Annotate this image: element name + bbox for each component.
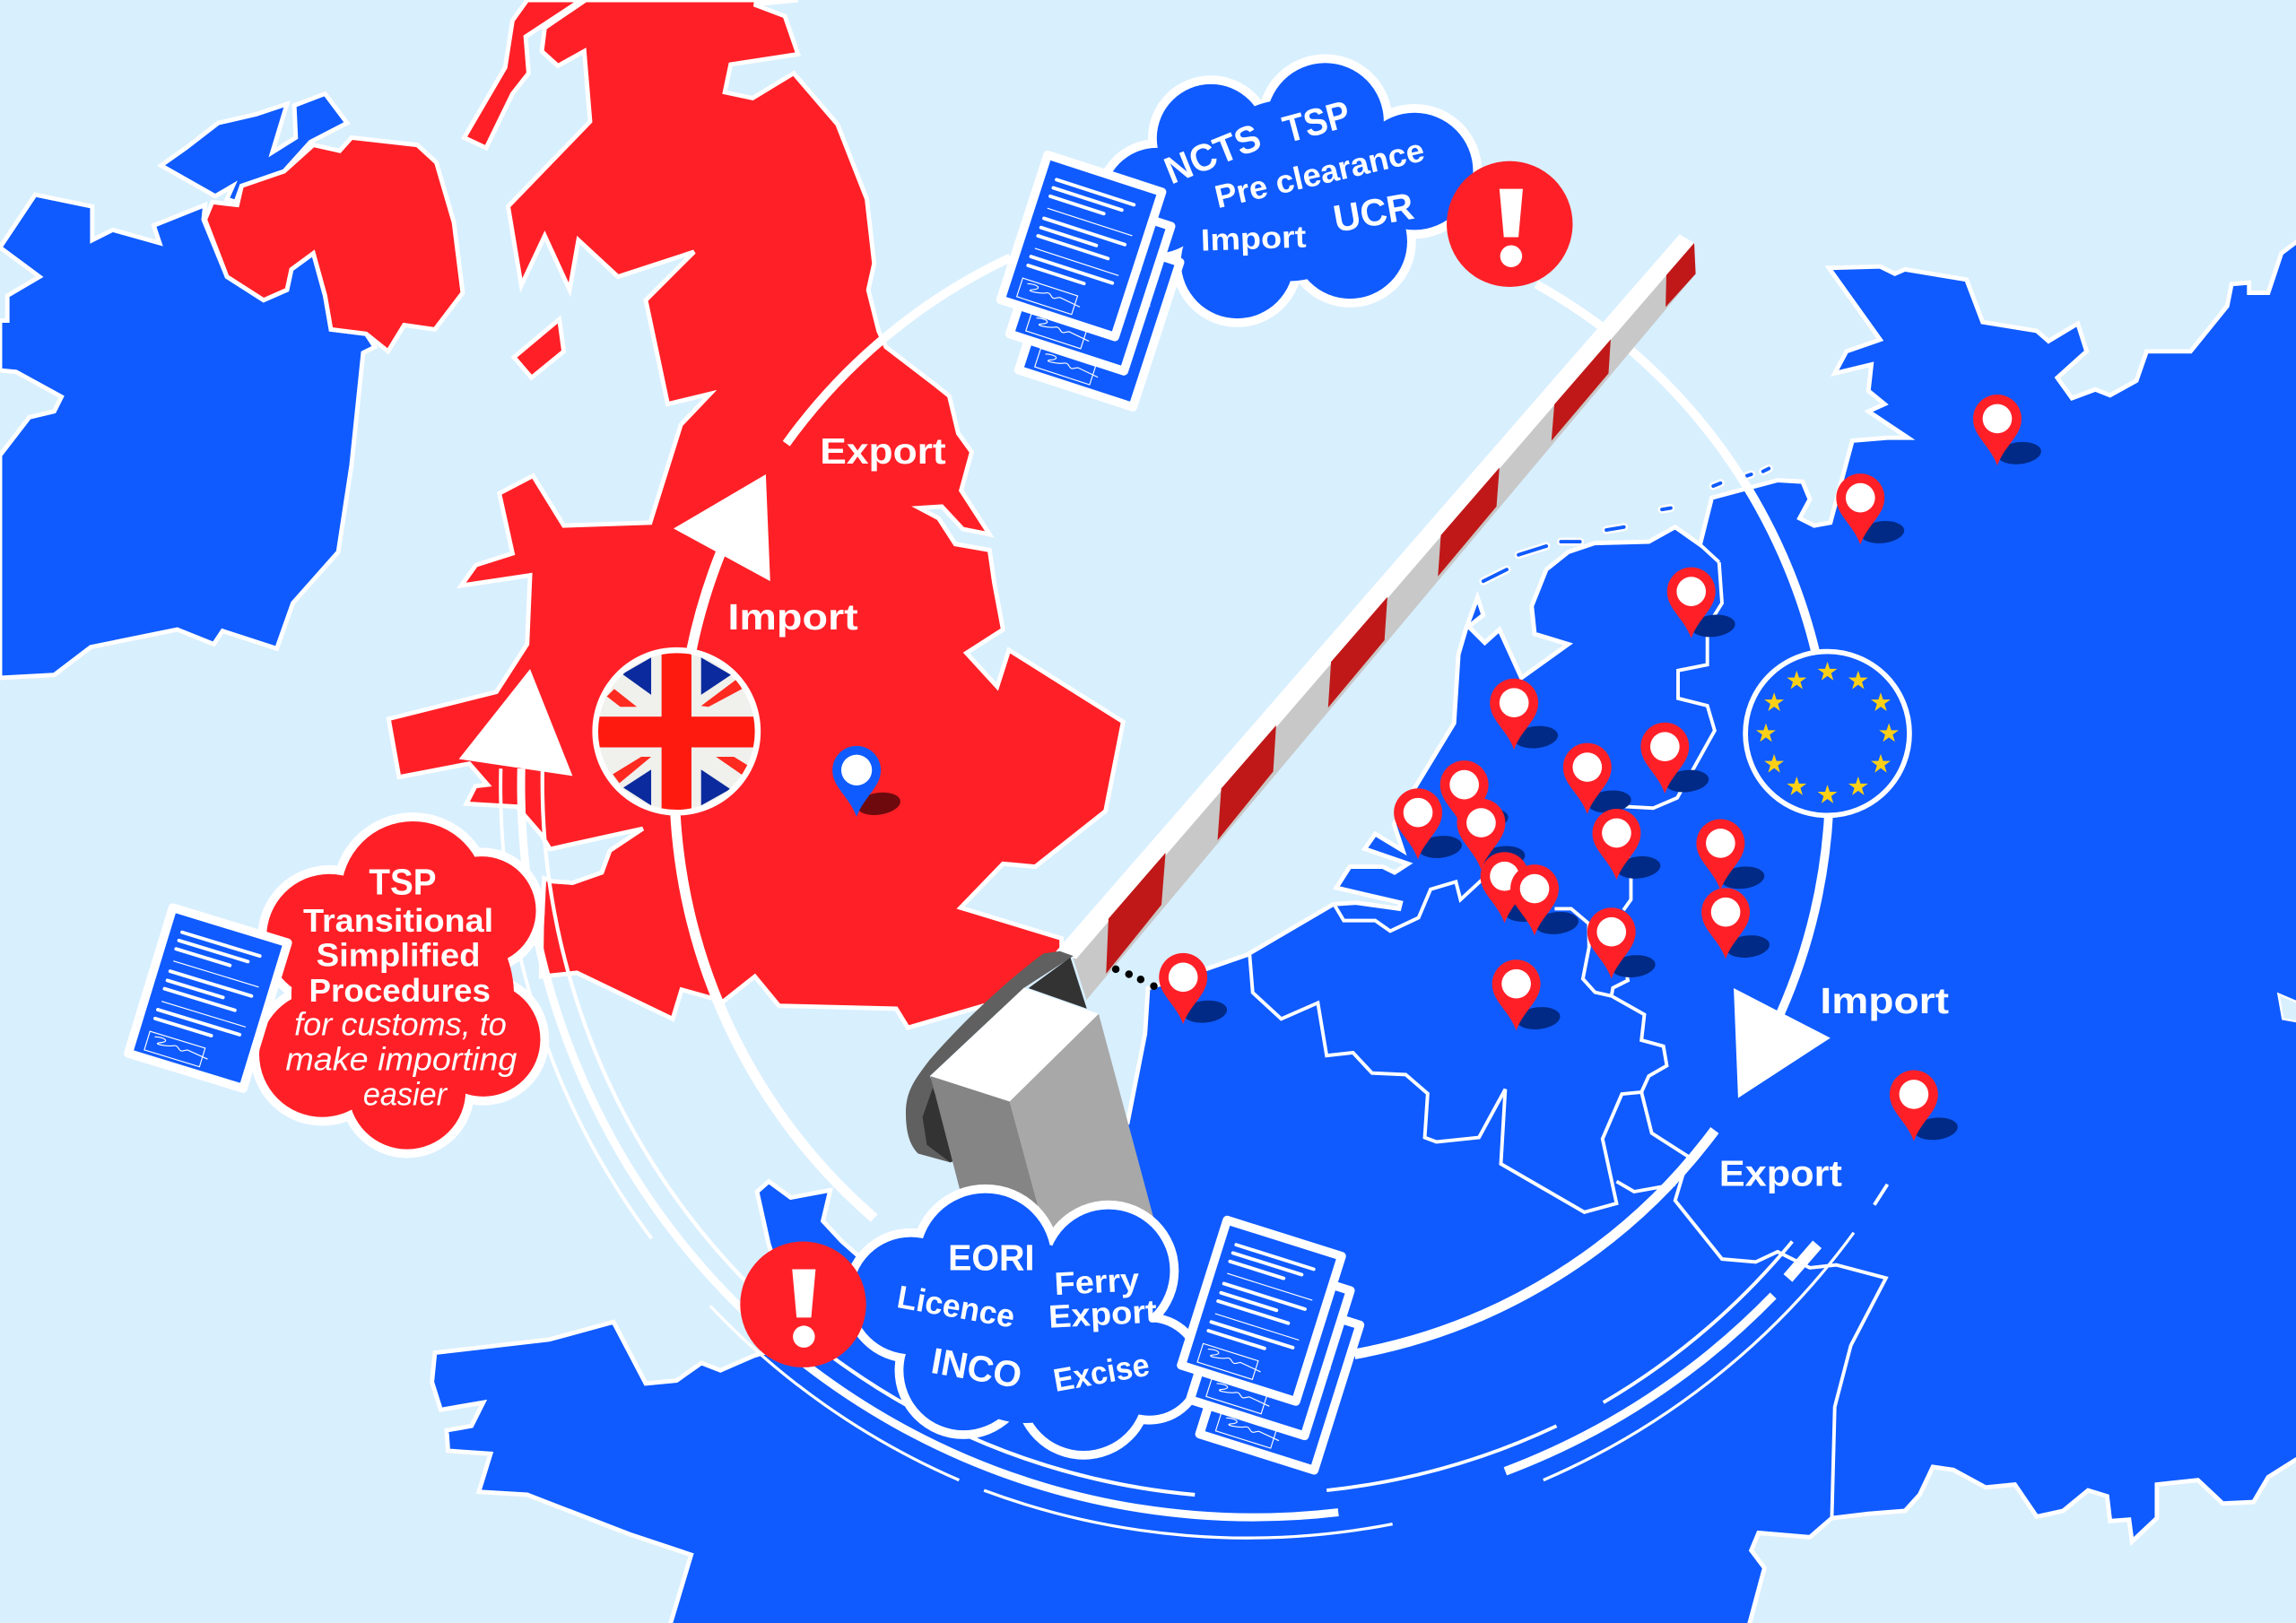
icon: bottom document stack (1181, 1220, 1360, 1471)
pin: Netherlands east (1640, 723, 1709, 794)
cloud text: Pre clearance: Pre clearance (1211, 131, 1428, 215)
cloud text: Excise: Excise (1050, 1346, 1152, 1399)
panel: TSP red cloud (250, 812, 549, 1158)
pin: Belgium north (1510, 864, 1579, 936)
arc: warning to EU flag (1536, 284, 1815, 653)
label: Import EU: Import (1820, 980, 1950, 1021)
Frisian islands (1483, 468, 1769, 581)
pin: Netherlands north-west (1490, 679, 1559, 751)
continental Europe (432, 234, 2296, 1623)
icon: EU flag (1745, 652, 1909, 815)
pin: Germany south (1890, 1070, 1959, 1142)
panel: top customs cloud (1095, 54, 1482, 327)
cloud text: Import: Import (1200, 221, 1307, 258)
icon: top warning badge (1447, 161, 1572, 287)
arc: EU flag to import arrow (1780, 812, 1829, 1013)
cloud text: Licence: Licence (894, 1278, 1018, 1335)
main circular route arcs (675, 257, 1829, 1354)
Northern Ireland (205, 137, 463, 352)
pin: UK Midlands (832, 746, 902, 818)
arrow: UK export direction (674, 474, 770, 581)
pin: Germany Rhine (1701, 888, 1770, 959)
arc: UK flag downward (675, 808, 874, 1218)
Ireland (0, 195, 375, 678)
label: Export UK: Export (820, 430, 946, 472)
cloud text: EORI: EORI (948, 1237, 1034, 1278)
pin: Brussels area (1492, 959, 1561, 1031)
label: Import UK: Import (727, 596, 858, 638)
pin: Germany north (1973, 395, 2042, 466)
arrow: UK west (459, 669, 572, 776)
pin: Netherlands north-east (1667, 568, 1736, 639)
Isle of Man (514, 319, 564, 378)
arrow: EU import direction (1734, 988, 1831, 1098)
small inlet at right edge (2278, 994, 2296, 1022)
cloud text: make importing: make importing (285, 1040, 517, 1077)
cloud text: TSP: TSP (1278, 92, 1354, 151)
cloud text: Transitional: Transitional (303, 902, 493, 939)
panel: bottom customs cloud (843, 1185, 1205, 1460)
outer concentric arcs (500, 768, 1887, 1538)
icon: UK flag (592, 647, 761, 816)
label: Export EU: Export (1719, 1152, 1842, 1193)
pin: Netherlands west (1440, 760, 1509, 832)
pin: Calais (1159, 953, 1228, 1025)
pin: Netherlands south-west (1457, 799, 1526, 871)
arc: import arrow to UK flag (691, 553, 720, 652)
cloud text: easier: easier (363, 1076, 448, 1113)
pin: Rotterdam coast (1394, 788, 1463, 860)
dotted link to Calais (1112, 966, 1158, 990)
Donegal (161, 94, 347, 202)
arc: export to documents (787, 257, 1011, 444)
cloud text: NCTS: NCTS (1159, 116, 1266, 192)
pin: Antwerp (1481, 852, 1550, 924)
icon: top document stack (1001, 155, 1180, 407)
cloud text: INCO: INCO (928, 1340, 1025, 1396)
icon: bottom warning badge (740, 1242, 866, 1367)
pin: Netherlands centre (1563, 743, 1632, 815)
cloud text: Export: Export (1048, 1292, 1158, 1335)
icon: TSP document (128, 907, 288, 1089)
Great Britain (388, 0, 1123, 1028)
cloud text: TSP heading: TSP (369, 862, 437, 903)
cloud text: UCR: UCR (1330, 185, 1417, 240)
pin: Germany west (1696, 819, 1765, 891)
pin: Germany coast (1836, 473, 1905, 545)
barrier post (906, 951, 1157, 1245)
pin: Maastricht area (1587, 907, 1657, 979)
arc: export to documents bottom (1354, 1130, 1715, 1354)
cloud text: Simplified: Simplified (317, 937, 481, 974)
Kintyre peninsula (465, 0, 581, 148)
barrier arm (1056, 234, 1696, 1000)
cloud text: Procedures: Procedures (309, 972, 491, 1009)
pin: Netherlands south-east (1593, 809, 1662, 881)
cloud text: Ferry: Ferry (1054, 1261, 1140, 1302)
country borders (1249, 544, 1886, 1518)
cloud text: for customs, to: for customs, to (294, 1005, 507, 1042)
